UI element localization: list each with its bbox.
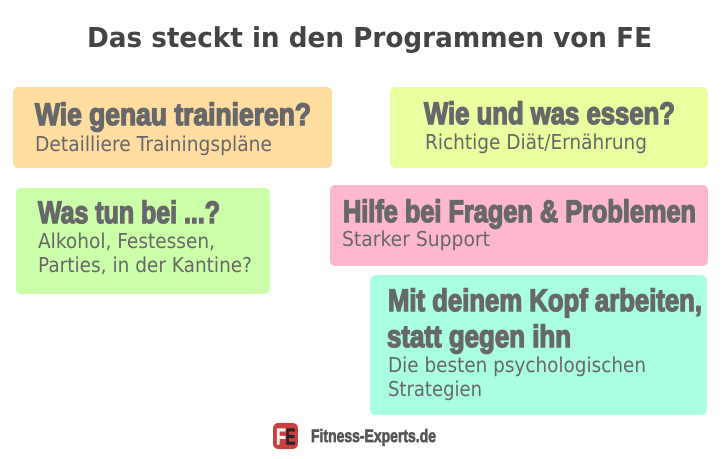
heading: training: Wie genau trainieren? [35, 97, 311, 132]
logo: Fitness-Experts.de [273, 423, 436, 450]
heading: psychology: statt gegen ihn [387, 319, 571, 354]
panel: psychology [370, 275, 707, 415]
text: training: Detailliere Trainingspläne [35, 132, 272, 156]
text: psychology: Die besten psychologischen [388, 353, 646, 377]
title: Das steckt in den Programmen von FE [87, 22, 652, 54]
heading: situations: Was tun bei ...? [38, 195, 220, 230]
logo text: Fitness-Experts.de [311, 426, 436, 446]
text: psychology [388, 353, 646, 401]
text: psychology: Strategien [388, 377, 482, 401]
text: nutrition: Richtige Diät/Ernährung [425, 130, 647, 154]
text: situations [38, 229, 252, 277]
text: situations: Alkohol, Festessen, [38, 229, 215, 253]
icon: FE badge: F [276, 424, 286, 450]
panel: nutrition [390, 87, 708, 168]
panel: situations [16, 188, 270, 294]
panel: support [330, 185, 708, 266]
heading: nutrition: Wie und was essen? [424, 96, 675, 131]
text: support: Starker Support [342, 227, 490, 251]
panel: training [13, 87, 332, 168]
text: situations: Parties, in der Kantine? [38, 253, 252, 277]
heading: psychology [387, 283, 702, 354]
icon: FE badge [273, 423, 298, 450]
icon: FE badge: E [286, 424, 296, 450]
